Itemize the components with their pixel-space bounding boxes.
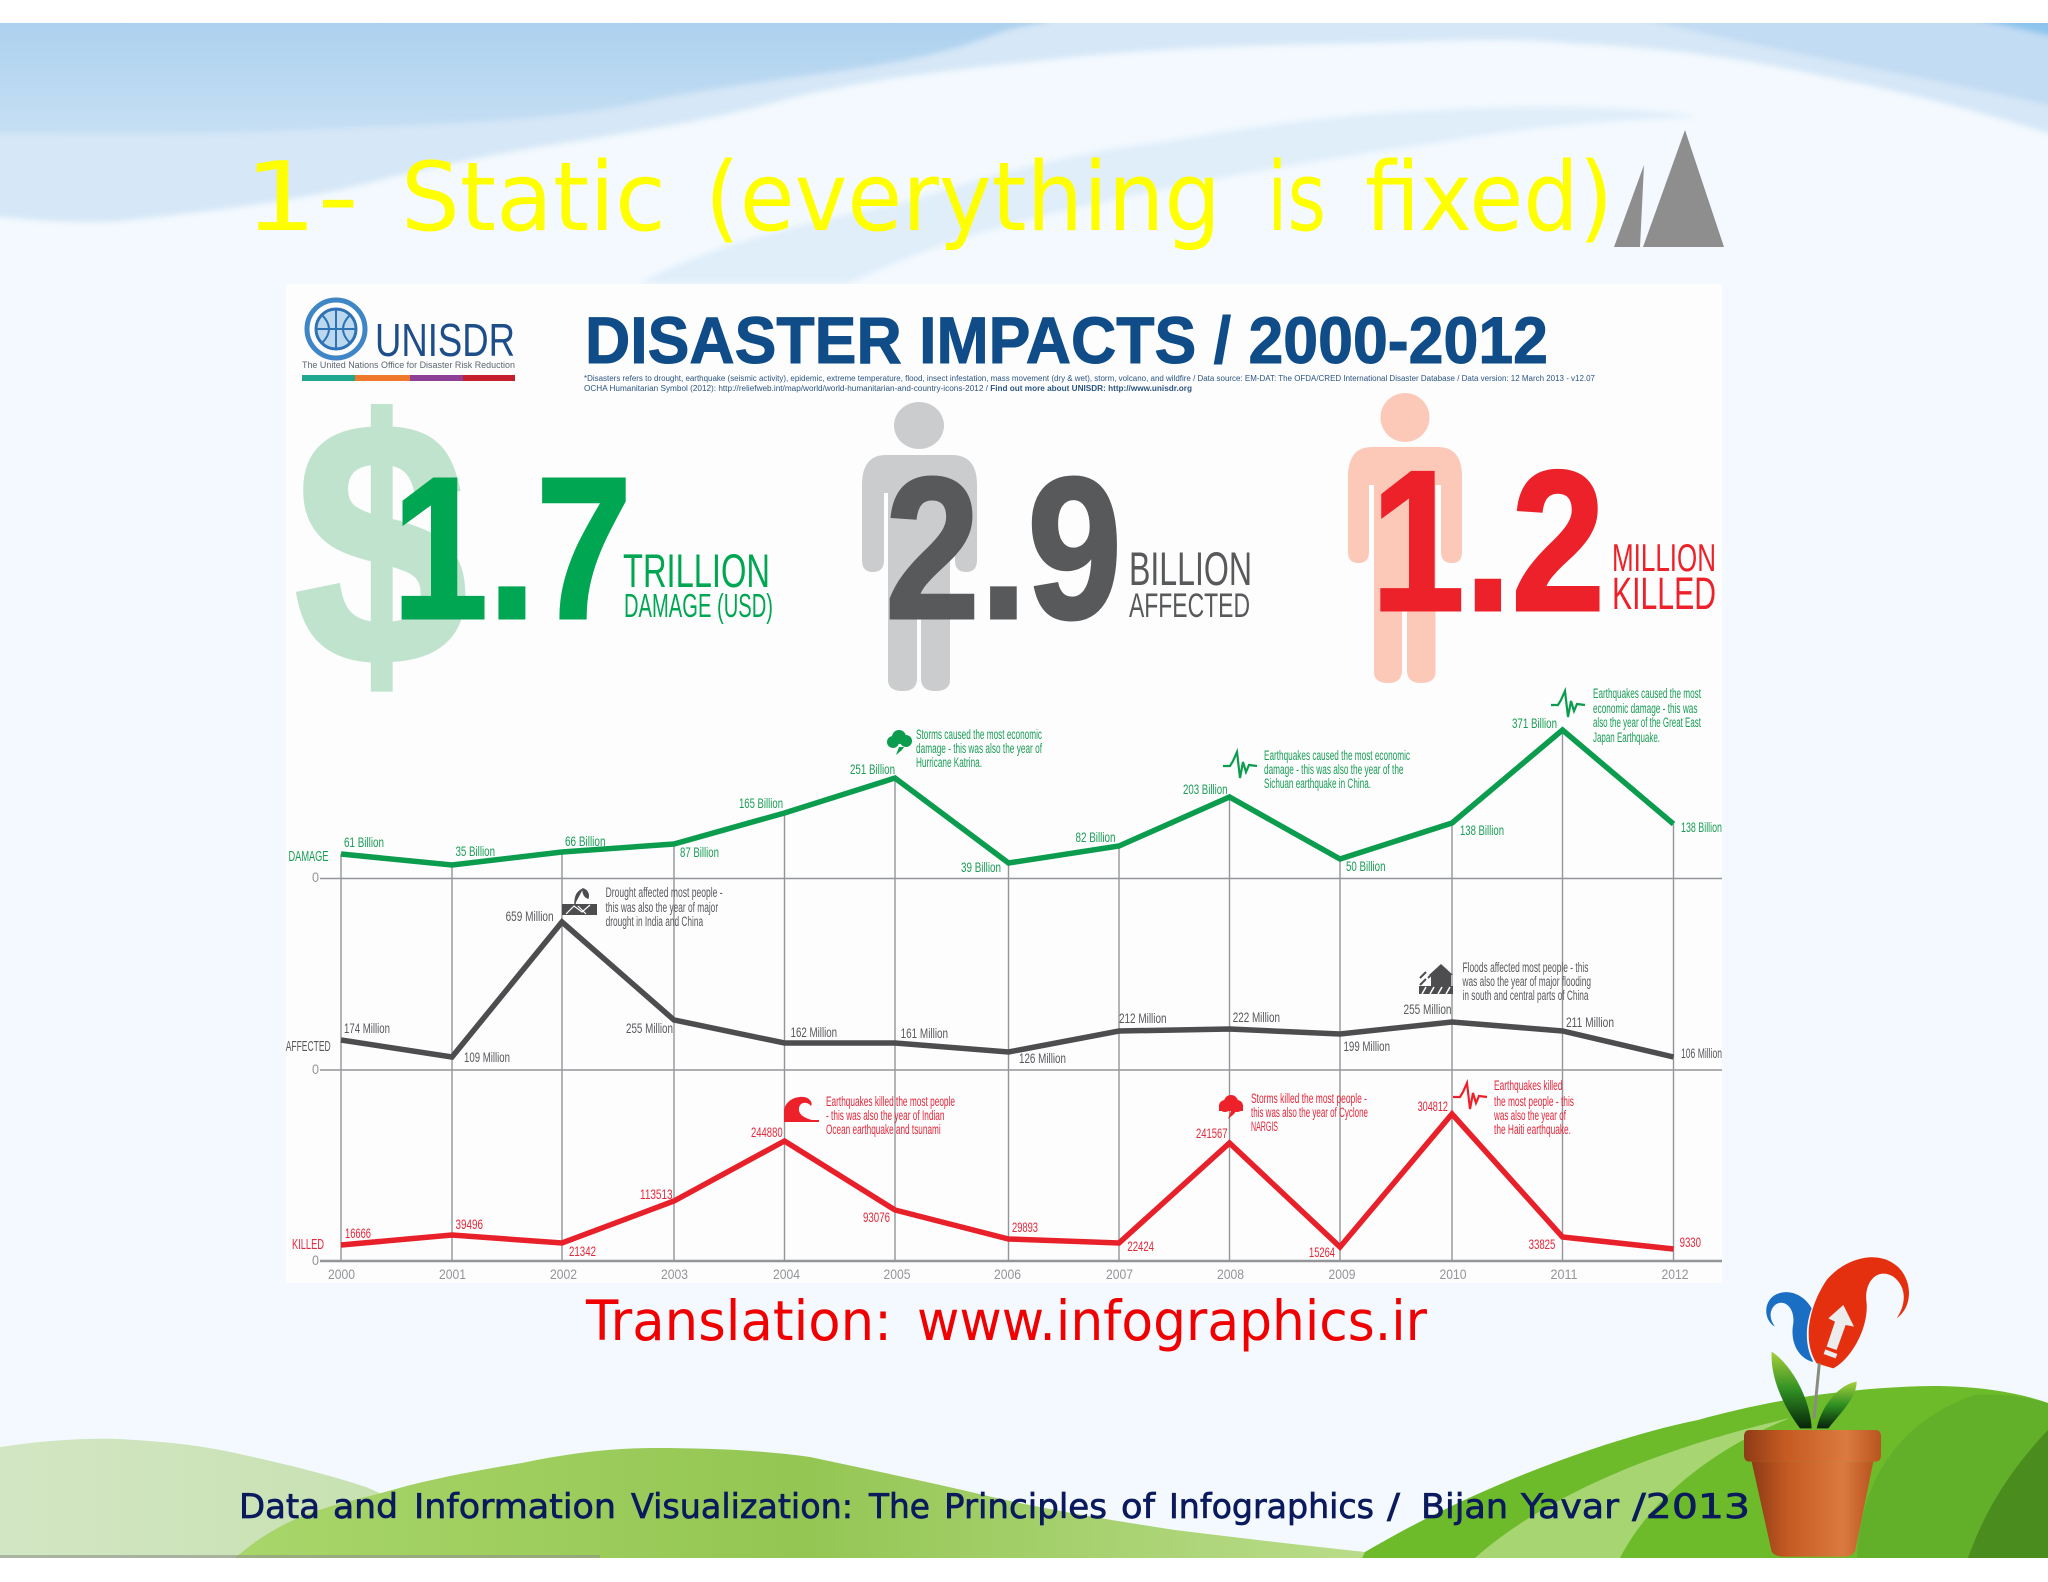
footer credit: Visualization: (631, 1487, 853, 1527)
chart: damage line: 61 Billion (344, 834, 384, 850)
year axis (328, 1266, 1689, 1282)
green hills (0, 1386, 2048, 1558)
footer credit: /2013 (1632, 1487, 1750, 1527)
chart: damage line: 203 Billion (1183, 781, 1228, 797)
callout: earthquakes damage 2008: Earthquakes caused the most economic (1264, 748, 1410, 763)
chart: affected line: 255 Million (1404, 1001, 1452, 1017)
callout: earthquakes damage 2011 (1551, 686, 1701, 745)
chart: killed line (292, 1098, 1701, 1260)
chart: killed line: 244880 (751, 1124, 783, 1140)
icon: dollar sign: $ (295, 352, 467, 737)
chart: killed line: 304812 (1418, 1098, 1448, 1114)
year axis: 2005 (884, 1266, 911, 1282)
chart: damage line: 35 Billion (456, 843, 495, 859)
main heading: (everything (705, 143, 1221, 253)
chart: killed line: 9330 (1680, 1234, 1701, 1250)
chart: affected line: 106 Million (1681, 1045, 1722, 1061)
stat: affected (862, 402, 1252, 691)
callout: earthquakes damage 2011: economic damage - this was (1593, 701, 1698, 716)
chart: affected line: 161 Million (901, 1025, 948, 1041)
chart: affected line: 109 Million (464, 1049, 510, 1065)
footer credit: Bijan (1421, 1487, 1508, 1527)
stat: killed: MILLION (1612, 537, 1716, 580)
chart: damage line: 251 Billion (850, 761, 895, 777)
callout: cyclone 2008: Storms killed the most people - (1251, 1091, 1367, 1106)
chart: affected line: 212 Million (1119, 1010, 1166, 1026)
callout: tsunami 2004: - this was also the year of Indian (826, 1108, 944, 1123)
callout: Haiti earthquake 2010: the most people - this (1494, 1094, 1574, 1109)
stat: damage: TRILLION (623, 544, 770, 597)
chart: damage line: 138 Billion (1460, 822, 1504, 838)
footer credit: and (333, 1487, 398, 1527)
year axis: 2011 (1550, 1266, 1578, 1282)
year axis: 2008 (1217, 1266, 1244, 1282)
main heading: is (1267, 143, 1326, 253)
callout: storms damage 2005: Storms caused the most economic (916, 727, 1042, 742)
chart: killed line: 16666 (345, 1225, 371, 1241)
callout: tsunami 2004 (784, 1094, 955, 1137)
footer credit: of (1121, 1487, 1156, 1527)
chart: killed line: 21342 (569, 1243, 596, 1259)
footer credit: Principles (944, 1487, 1107, 1527)
translation credit: Translation: (585, 1289, 892, 1353)
footer credit: Information (414, 1487, 616, 1527)
stat: affected: BILLION (1129, 542, 1252, 595)
footer credit: Data (239, 1487, 320, 1527)
stat: damage (295, 352, 773, 737)
callout: earthquakes damage 2011: also the year of the Great East (1593, 715, 1701, 730)
year axis: 2004 (773, 1266, 800, 1282)
chart: affected line: 659 Million (506, 908, 554, 924)
line charts (286, 686, 1722, 1282)
chart: damage line: 165 Billion (739, 795, 783, 811)
callout: cyclone 2008 (1219, 1091, 1368, 1134)
callout: tsunami 2004: Earthquakes killed the most people (826, 1094, 955, 1109)
chart: damage line: 87 Billion (680, 844, 719, 860)
panel: disaster impacts infographic (286, 284, 1722, 1283)
chart: affected line: 162 Million (791, 1024, 837, 1040)
callout: drought 2002: this was also the year of major (606, 900, 718, 915)
UNISDR logo: UNISDR (375, 314, 515, 366)
title: DISASTER IMPACTS / 2000-2012 (585, 303, 1548, 377)
callout: floods 2010 (1419, 960, 1591, 1003)
callout: earthquakes damage 2011: Japan Earthquake. (1593, 730, 1660, 745)
chart: killed line: 29893 (1012, 1219, 1038, 1235)
stat: affected: AFFECTED (1129, 587, 1250, 625)
chart: killed line: 33825 (1529, 1236, 1556, 1252)
callout: floods 2010: was also the year of major flooding (1462, 974, 1591, 989)
stat: killed: KILLED (1612, 568, 1716, 619)
icon: grey person (862, 402, 977, 691)
callout: storms damage 2005 (887, 727, 1042, 770)
callout: Haiti earthquake 2010 (1453, 1078, 1574, 1137)
footer credit: Yavar (1520, 1487, 1619, 1527)
line charts: 0 (312, 1252, 319, 1268)
year axis: 2002 (550, 1266, 577, 1282)
year axis: 2007 (1106, 1266, 1133, 1282)
line charts: 0 (312, 869, 319, 885)
main heading: Static (401, 143, 666, 253)
main heading: fixed) (1365, 143, 1613, 253)
chart: damage line: 82 Billion (1076, 829, 1116, 845)
chart: damage line: 66 Billion (565, 833, 606, 849)
year axis: 2010 (1440, 1266, 1467, 1282)
chart: killed line: 15264 (1309, 1244, 1335, 1260)
chart: damage line: 39 Billion (961, 859, 1001, 875)
chart: affected line: 174 Million (344, 1020, 390, 1036)
callout: drought 2002: drought in India and China (606, 914, 703, 929)
callout: Haiti earthquake 2010: Earthquakes killed (1494, 1078, 1562, 1093)
chart: affected line: AFFECTED (286, 1038, 331, 1055)
chart: damage line: 371 Billion (1512, 715, 1557, 731)
translation credit (585, 1289, 1427, 1353)
chart: affected line (286, 908, 1722, 1066)
source note (584, 374, 1596, 393)
UNISDR logo (302, 300, 515, 381)
UNISDR logo: The United Nations Office for Disaster Risk Reduction (302, 360, 515, 370)
icon: flower pot logo (1744, 1257, 1909, 1557)
main heading: 1- (244, 143, 359, 253)
year axis: 2001 (439, 1266, 466, 1282)
callout: cyclone 2008: this was also the year of Cyclone (1251, 1105, 1368, 1120)
chart: damage line (288, 715, 1722, 875)
chart: affected line: 199 Million (1344, 1038, 1390, 1054)
source note: *Disasters refers to drought, earthquake (seismic activity), epidemic, extreme temperature, flood, insect infestation, mass movement (dry & wet), storm, volcano, and wildfire / Data source: EM-DAT: The OFDA/CRED International Disaster Database / Data version: 12 March 2013 - v12.07 (584, 374, 1596, 383)
chart: damage line: DAMAGE (288, 848, 328, 865)
callout: earthquakes damage 2008: Sichuan earthquake in China. (1264, 776, 1371, 791)
stat: killed (1348, 393, 1716, 683)
callout: Haiti earthquake 2010: was also the year of (1493, 1108, 1566, 1123)
callout: tsunami 2004: Ocean earthquake and tsunami (826, 1122, 941, 1137)
callout: earthquakes damage 2011: Earthquakes caused the most (1593, 686, 1701, 701)
footer credit: Infographics (1169, 1487, 1374, 1527)
callout: floods 2010: Floods affected most people - this (1462, 960, 1589, 975)
line charts: 0 (312, 1061, 319, 1077)
footer credit: The (868, 1487, 930, 1527)
callout: earthquakes damage 2008 (1223, 748, 1410, 791)
stat: killed: 1.2 (1371, 430, 1605, 653)
footer credit: / (1387, 1487, 1401, 1527)
callout: storms damage 2005: Hurricane Katrina. (916, 755, 982, 770)
main heading (244, 143, 1613, 253)
chart: damage line: 50 Billion (1346, 858, 1386, 874)
callout: cyclone 2008: NARGIS (1251, 1119, 1278, 1134)
callout: Haiti earthquake 2010: the Haiti earthquake. (1494, 1122, 1571, 1137)
chart: affected line: 255 Million (626, 1020, 673, 1036)
year axis: 2006 (994, 1266, 1021, 1282)
year axis: 2012 (1662, 1266, 1689, 1282)
chart: killed line: 39496 (456, 1216, 483, 1232)
icon: pink person (1348, 393, 1462, 683)
chart: affected line: 126 Million (1019, 1050, 1066, 1066)
chart: killed line: 93076 (863, 1209, 890, 1225)
footer credit (239, 1487, 1750, 1527)
chart: killed line: 22424 (1127, 1238, 1154, 1254)
year axis: 2009 (1328, 1266, 1356, 1282)
source note: OCHA Humanitarian Symbol (2012): http://reliefweb.int/map/world/world-humanitarian-and-country-icons-2012 / Find out more about UNISDR: http://www.unisdr.org (584, 384, 1192, 393)
chart: killed line: 113513 (640, 1186, 673, 1202)
year axis: 2003 (661, 1266, 688, 1282)
chart: killed line: 241567 (1196, 1125, 1228, 1141)
stat: affected: 2.9 (885, 435, 1122, 661)
chart: killed line: KILLED (292, 1236, 324, 1253)
icon: grey triangles (1614, 130, 1724, 247)
stat: damage: 1.7 (392, 435, 632, 661)
chart: damage line: 138 Billion (1681, 819, 1722, 835)
callout: storms damage 2005: damage - this was also the year of (916, 741, 1042, 756)
callout: floods 2010: in south and central parts of China (1462, 988, 1589, 1003)
stat: damage: DAMAGE (USD) (624, 587, 773, 624)
translation credit: www.infographics.ir (917, 1289, 1427, 1353)
chart: affected line: 211 Million (1566, 1014, 1614, 1030)
callout: earthquakes damage 2008: damage - this was also the year of the (1264, 762, 1404, 777)
year axis: 2000 (328, 1266, 355, 1282)
callout: drought 2002: Drought affected most people - (606, 885, 723, 900)
chart: affected line: 222 Million (1233, 1009, 1280, 1025)
callout: drought 2002 (562, 885, 723, 929)
